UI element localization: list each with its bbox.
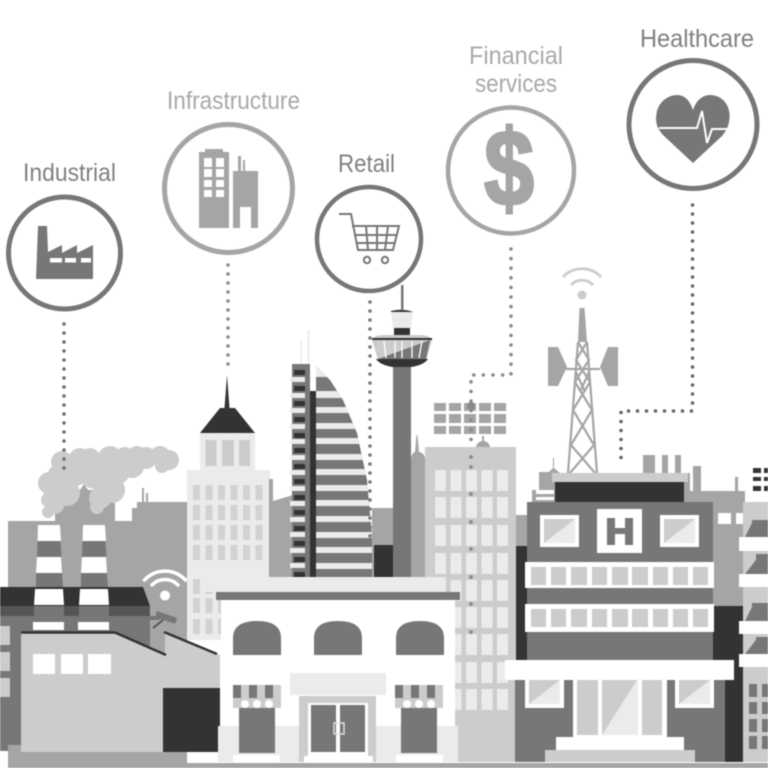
small dark window block bbox=[750, 465, 768, 492]
solar panel bbox=[434, 403, 506, 434]
connector dots: infrastructure bbox=[226, 265, 230, 366]
icon circle: industrial factory bbox=[8, 197, 120, 309]
icon circle: financial dollar bbox=[448, 108, 574, 234]
heading: Industrial: Industrial bbox=[23, 159, 116, 187]
hospital entrance bbox=[573, 680, 667, 737]
small white windows behind hospital bbox=[536, 490, 745, 524]
hospital bbox=[505, 473, 743, 762]
factory complex bbox=[0, 525, 220, 752]
factory main hall bbox=[21, 632, 220, 752]
smoke cloud bbox=[38, 446, 179, 518]
apartment block right edge bbox=[739, 502, 768, 762]
store sign bbox=[290, 673, 386, 695]
wifi signal at factory bbox=[144, 571, 186, 600]
financial building bbox=[425, 436, 516, 762]
grey block beside sail tower bbox=[269, 479, 293, 577]
retail store bbox=[200, 577, 460, 763]
connector dots: healthcare bbox=[621, 205, 692, 463]
heading: Infrastructure: Infrastructure bbox=[167, 87, 300, 115]
sail tower bbox=[290, 330, 376, 577]
icon circle: financial dollar: $ bbox=[484, 108, 534, 229]
icon circle: infrastructure buildings bbox=[164, 124, 292, 252]
heading: Retail: Retail bbox=[338, 150, 395, 178]
hospital ground window right bbox=[675, 680, 714, 708]
wifi signal over cell tower bbox=[563, 269, 601, 300]
left cooling tower bbox=[36, 525, 63, 589]
block and dark bases behind observation tower bbox=[372, 508, 425, 577]
hospital ground window left bbox=[525, 680, 564, 708]
hospital H sign bbox=[597, 509, 642, 553]
cell tower bbox=[548, 308, 618, 473]
connector dots: industrial bbox=[62, 324, 66, 469]
slim grey tower bbox=[411, 435, 425, 577]
hospital top window left bbox=[540, 515, 579, 547]
heading: Financial services: services bbox=[475, 70, 557, 98]
observation tower bbox=[372, 285, 432, 577]
right cooling tower bbox=[81, 525, 108, 589]
grey wall behind factory roof bbox=[150, 620, 165, 655]
icon circle: healthcare heart bbox=[629, 60, 757, 188]
right shop window with awning bbox=[395, 685, 443, 763]
connector dots: retail bbox=[368, 302, 372, 548]
dark building beside hospital bbox=[713, 606, 743, 762]
white office tower bbox=[187, 375, 270, 640]
hospital steps bbox=[545, 737, 695, 762]
hospital window band upper bbox=[525, 562, 714, 588]
factory door bbox=[163, 688, 220, 752]
heading: Healthcare: Healthcare bbox=[640, 25, 754, 53]
left shop window with awning bbox=[233, 685, 281, 763]
icon circle: retail cart bbox=[317, 187, 421, 291]
hospital top window right bbox=[660, 515, 699, 547]
hospital canopy bbox=[505, 660, 734, 680]
background buildings behind hospital bbox=[532, 455, 745, 606]
store arched windows bbox=[233, 621, 444, 655]
heading: Financial services: Financial bbox=[469, 42, 563, 70]
background buildings behind factory bbox=[8, 484, 187, 768]
factory roof lines bbox=[21, 632, 217, 655]
factory windows bbox=[33, 654, 111, 674]
security camera bbox=[153, 611, 177, 628]
dark factory roof band bbox=[0, 587, 150, 630]
hospital window band lower bbox=[525, 604, 714, 632]
connector dots: financial services bbox=[467, 249, 511, 634]
ground strip bbox=[8, 763, 768, 768]
store door bbox=[299, 696, 376, 763]
